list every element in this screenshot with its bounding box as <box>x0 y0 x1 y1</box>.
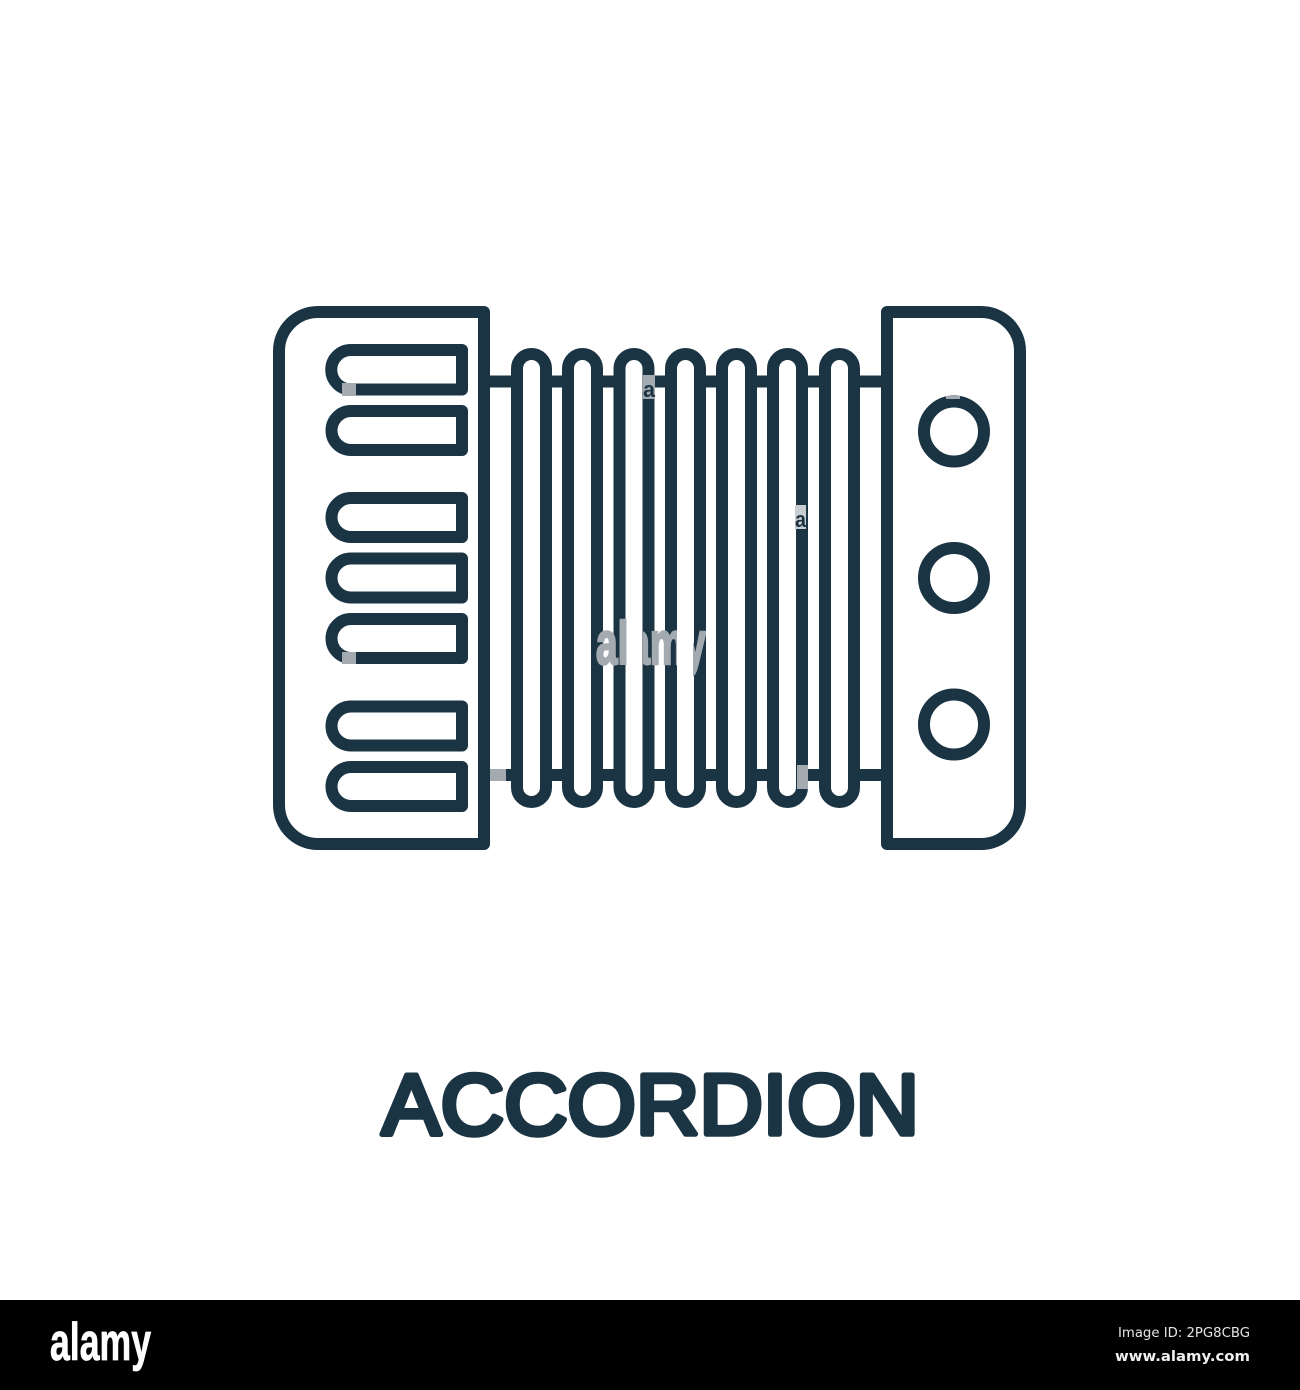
right button panel <box>887 312 1020 844</box>
footer logo: alamy <box>50 1313 151 1372</box>
icon: accordion <box>279 312 1020 844</box>
website: www.alamy.com <box>1115 1349 1250 1365</box>
title: ACCORDION <box>382 1058 919 1153</box>
small watermarks <box>342 375 960 789</box>
central watermark: alamy <box>596 610 706 677</box>
footer bar <box>0 1300 1300 1390</box>
bass buttons <box>924 402 984 754</box>
bellows connector bars <box>484 382 887 775</box>
piano keys <box>331 350 462 806</box>
image id: Image ID: 2PG8CBG <box>1118 1325 1250 1341</box>
left keyboard panel <box>279 312 484 844</box>
bellows pleats <box>517 354 854 802</box>
small watermarks: a <box>643 377 656 402</box>
small watermarks: a <box>795 507 807 532</box>
